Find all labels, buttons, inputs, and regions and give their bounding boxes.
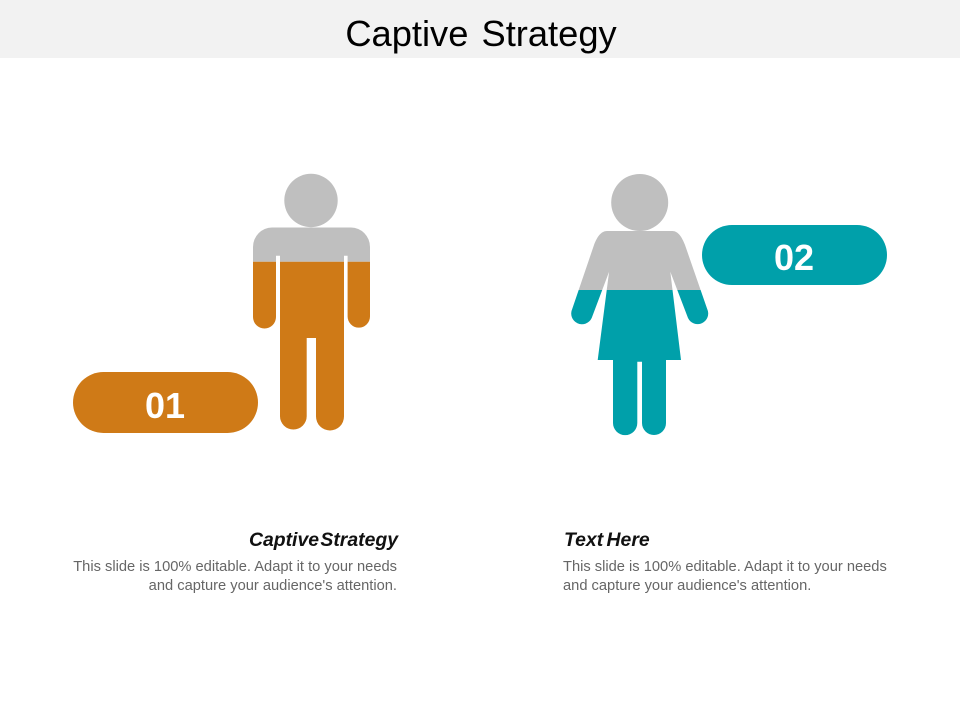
description left: This slide is 100% editable. Adapt it to your needs xyxy=(73,559,397,575)
figures and number badges xyxy=(73,174,887,436)
description left xyxy=(73,559,397,594)
figure: woman xyxy=(571,174,708,435)
description right: and capture your audience's attention. xyxy=(563,578,811,594)
title: Captive Strategy xyxy=(345,13,617,54)
badge 01: 01 xyxy=(145,385,185,426)
figure: man xyxy=(253,174,370,431)
badge 02 xyxy=(702,225,887,285)
heading: text here: Text Here xyxy=(564,529,650,551)
badge 02: 02 xyxy=(774,237,814,278)
badge 01 xyxy=(73,372,258,433)
title bar xyxy=(0,0,960,58)
text block: text here xyxy=(563,529,887,594)
heading: captive strategy: Captive Strategy xyxy=(249,529,398,551)
text block: captive strategy xyxy=(73,529,399,594)
description right: This slide is 100% editable. Adapt it to your needs xyxy=(563,559,887,575)
description left: and capture your audience's attention. xyxy=(149,578,397,594)
description right xyxy=(563,559,887,594)
